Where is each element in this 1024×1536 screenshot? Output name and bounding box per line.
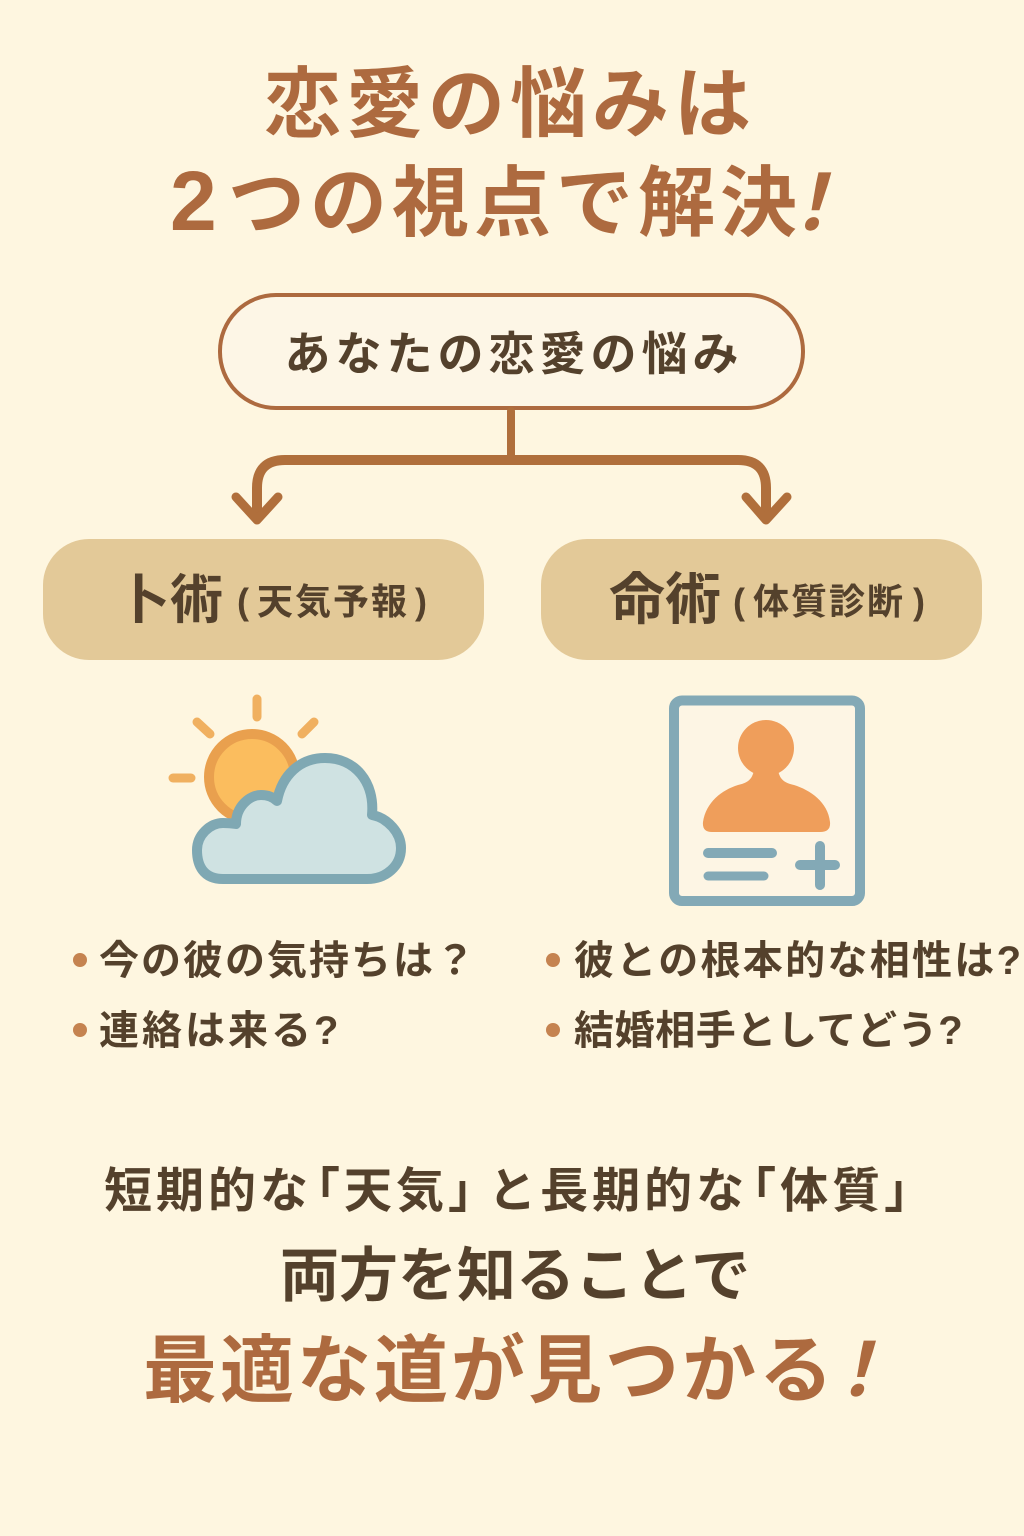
right bullet 1: 彼との根本的な相性は? [574,939,1023,983]
left bullet list [73,939,477,1053]
right bullet list [546,939,1023,1053]
left bullet 1: 今の彼の気持ちは？ [99,939,477,983]
summary text [104,1165,936,1412]
title line 1: 恋愛の悩みは [264,62,756,148]
left pill: divination [43,539,484,660]
summary line 1: 短期的な「天気」と長期的な「体質」 [104,1165,936,1218]
title line 2: つの視点で解決！ [228,161,854,247]
left bullet 2: 連絡は来る? [99,1009,341,1053]
left pill main label: 卜術 [117,571,223,630]
top box: your love problem: あなたの恋愛の悩み [284,328,744,380]
left pill sub label: ( [237,581,249,622]
top box: your love problem [218,293,805,410]
right pill sub label: 体質診断) [753,581,925,622]
icon: profile card [669,696,865,906]
right bullet 2: 結婚相手としてどう? [574,1009,963,1053]
title [170,62,854,248]
right pill: constitution reading [541,539,982,660]
branching arrows [232,410,792,524]
icon: sun and cloud [168,694,406,884]
summary highlight: 最適な道が見つかる！ [143,1329,896,1412]
right pill sub label: ( [733,581,745,622]
summary line 2: 両方を知ることで [280,1243,750,1309]
left pill sub label: 天気予報) [257,581,427,622]
right pill main label: 命術 [609,568,721,631]
title line 2: 2 [170,154,217,248]
